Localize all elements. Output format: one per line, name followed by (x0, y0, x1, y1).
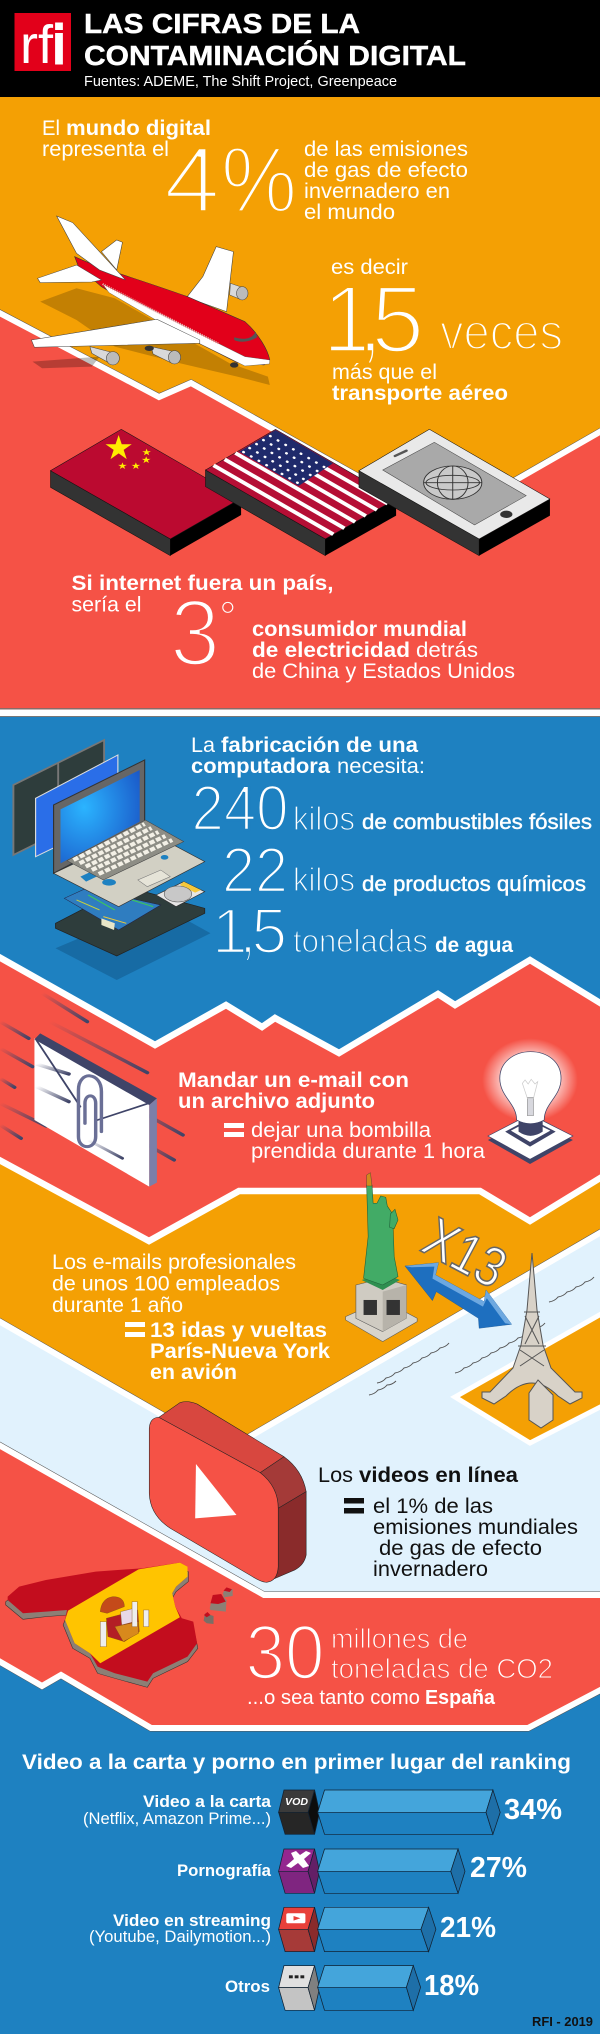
text block: third consumer: ° (219, 593, 237, 642)
text block: 30 million tons: ...o sea tanto como (247, 1686, 420, 1709)
text block: e-mail attachment: Mandar un e-mail con (178, 1069, 409, 1092)
row: Video en streaming (89, 1907, 496, 1952)
row: Pornografía (177, 1849, 527, 1893)
text block: 4 percent: % (221, 127, 297, 232)
text block: computer manufacturing: La (191, 734, 215, 757)
icon: Eiffel tower (482, 1253, 582, 1428)
text block: 1.5 times: es decir (331, 256, 408, 279)
stat: 22 kilos: kilos (293, 861, 355, 898)
panel: orange e-mail flights background (0, 1150, 600, 1460)
stat: 240 kilos: kilos (293, 800, 355, 837)
text block: 4 percent: El (42, 117, 60, 140)
icon: map of Spain with flag (6, 1563, 233, 1687)
row: Video en streaming: Video en streaming (113, 1911, 271, 1930)
text block: 4 percent: el mundo (304, 201, 395, 224)
stat: 240 kilos (192, 772, 592, 844)
text block: e-mail attachment: un archivo adjunto (178, 1090, 375, 1113)
chart: ranking bars (83, 1790, 562, 2010)
text block: professional e-mails (52, 1251, 330, 1384)
text block: 30 million tons: España (425, 1687, 496, 1709)
stat: 1.5 tons: toneladas (293, 923, 428, 959)
row: Video en streaming: (Youtube, Dailymotion...) (89, 1927, 271, 1946)
icon: airplane (31, 216, 270, 385)
icon: tablet with globe (359, 429, 550, 556)
title: CONTAMINACIÓN DIGITAL (84, 40, 466, 71)
stat: 240 kilos: de combustibles fósiles (362, 811, 592, 834)
panel: orange air transport background (0, 97, 600, 537)
stat: 22 kilos: de productos químicos (362, 873, 586, 896)
text block: professional e-mails: Los e-mails profesionales (52, 1251, 296, 1274)
text block: online videos: el 1% de las (373, 1495, 493, 1518)
text block: 30 million tons (246, 1610, 553, 1709)
icon: X (286, 1851, 311, 1868)
icon: video play button (149, 1402, 306, 1582)
text block: 1.5 times: 1,5 (322, 266, 424, 373)
text block: professional e-mails: en avión (150, 1361, 237, 1384)
text block: third consumer: 3 (170, 580, 220, 685)
icon: United States flag (206, 429, 396, 556)
stat: 1.5 tons (212, 895, 513, 967)
text block: online videos (318, 1464, 578, 1581)
label: x13: X13 (413, 1205, 517, 1300)
icon: equals sign (224, 1123, 244, 1137)
icon: light bulb (482, 1038, 578, 1164)
row: Otros: Otros (225, 1977, 270, 1996)
logo: rfi: rfi (20, 15, 65, 75)
text block: online videos: Los (318, 1464, 353, 1487)
text block: 4 percent (42, 117, 468, 232)
title (84, 8, 466, 71)
text block: professional e-mails: de unos 100 empleados (52, 1272, 280, 1296)
stat: 240 kilos: 240 (192, 772, 288, 844)
icon: China flag (51, 429, 241, 556)
row: Video a la carta (83, 1790, 562, 1834)
text block: 30 million tons: millones de (331, 1623, 468, 1654)
panel: light blue online video background (0, 1227, 600, 1610)
text block: professional e-mails: durante 1 año (52, 1294, 183, 1317)
row: Video a la carta: (Netflix, Amazon Prime...) (83, 1809, 271, 1828)
text block: 1.5 times: transporte aéreo (332, 382, 508, 405)
panel: red internet country background (0, 308, 600, 777)
row: Video a la carta: VOD (285, 1796, 308, 1808)
text block: 30 million tons: 30 (246, 1610, 324, 1696)
text block: third consumer: sería el (72, 594, 142, 616)
text block: computer manufacturing: fabricación de una (221, 734, 418, 757)
row: Video en streaming: 21% (440, 1912, 496, 1944)
text block: e-mail attachment: prendida durante 1 hora (251, 1140, 485, 1163)
text block: third consumer: de electricidad (252, 639, 410, 662)
heading: ranking: Video a la carta y porno en primer lugar del ranking (22, 1750, 571, 1774)
icon: equals sign (344, 1498, 364, 1514)
panel: orange Eiffel tower island (455, 1309, 600, 1443)
text block: 4 percent: 4 (164, 127, 220, 232)
text block: third consumer: detrás (416, 639, 478, 662)
text block: professional e-mails: 13 idas y vueltas (150, 1319, 327, 1342)
row: Video a la carta: 34% (504, 1794, 562, 1826)
title: LAS CIFRAS DE LA (84, 8, 360, 39)
icon: Statue of Liberty (346, 1173, 417, 1342)
text block: online videos: emisiones mundiales (373, 1516, 578, 1539)
icon: envelope with paperclip and speed lines (0, 993, 183, 1187)
text block: third consumer: Si internet fuera un país, (72, 572, 334, 595)
text block: 1.5 times: más que el (332, 361, 437, 384)
panel: red e-mail attachment background (0, 952, 600, 1241)
icon: equals sign (125, 1322, 145, 1337)
text block: 4 percent: de las emisiones (304, 138, 468, 161)
stat: 1.5 tons: de agua (435, 934, 513, 957)
panel: red Spain comparison background (0, 1440, 600, 1728)
text block: computer manufacturing (191, 734, 592, 967)
row: Pornografía: 27% (470, 1852, 527, 1884)
text block: 4 percent: de gas de efecto (304, 159, 468, 182)
text block: computer manufacturing: necesita: (337, 755, 425, 778)
text block: online videos: invernadero (373, 1558, 488, 1581)
text block: 30 million tons: toneladas de CO2 (331, 1653, 553, 1684)
icon: exploded laptop (13, 740, 210, 980)
text block: online videos: videos en línea (359, 1464, 518, 1487)
text block: 4 percent: invernadero en (304, 180, 450, 203)
text block: 1.5 times (322, 256, 563, 405)
stat: 1.5 tons: 1,5 (212, 895, 287, 967)
stat: 22 kilos (222, 834, 586, 906)
header band (0, 0, 600, 97)
text block: 1.5 times: veces (440, 304, 563, 360)
row: Pornografía: Pornografía (177, 1861, 272, 1880)
text block: 4 percent: representa el (42, 138, 169, 161)
stat: 22 kilos: 22 (222, 834, 288, 906)
text block: online videos: de gas de efecto (379, 1537, 542, 1560)
text block: third consumer (72, 572, 515, 685)
text block: e-mail attachment (178, 1069, 485, 1163)
text block: e-mail attachment: dejar una bombilla (251, 1119, 431, 1142)
row: Otros: 18% (424, 1970, 479, 2002)
text block: 4 percent: mundo digital (66, 117, 211, 140)
credit: RFI - 2019 (532, 2015, 593, 2029)
row: Video a la carta: Video a la carta (143, 1792, 272, 1811)
icon: double arrow (405, 1263, 512, 1328)
icon: river waves (369, 1277, 594, 1395)
sources: Fuentes: ADEME, The Shift Project, Greenpeace (84, 74, 397, 90)
flags and tablet (51, 429, 550, 556)
text block: professional e-mails: París-Nueva York (150, 1340, 330, 1363)
text block: third consumer: consumidor mundial (252, 618, 467, 641)
text block: computer manufacturing: computadora (191, 755, 330, 778)
row: Otros (225, 1966, 479, 2010)
text block: third consumer: de China y Estados Unidos (252, 660, 515, 683)
